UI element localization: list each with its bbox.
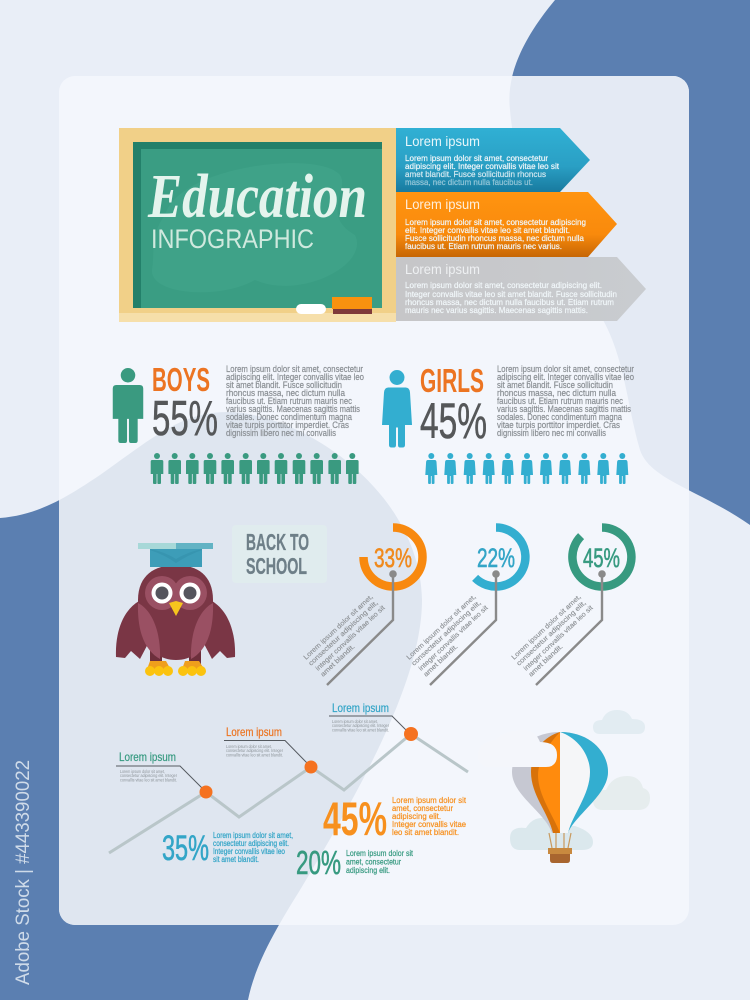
icon: cloud over balloon (478, 730, 557, 767)
callout: point 3: Lorem ipsum (332, 701, 389, 715)
text block (405, 217, 586, 251)
icon: owl (116, 543, 235, 676)
callout: point 2: convallis vitae leo sit amet blandit. (226, 752, 283, 758)
text block: dignissim libero nec mi convallis (497, 428, 606, 438)
stat: 35%: consectetur adipiscing elit. (213, 839, 289, 848)
rotated text: consectetur adipiscing elit, (516, 600, 588, 667)
donut: 33%: 33% (374, 543, 412, 573)
text block: faucibus ut. Etiam rutrum mauris nec (226, 396, 352, 406)
rotated text: integer convallis vitae leo sit (523, 605, 595, 672)
icon: girl (382, 370, 412, 448)
rotated text (303, 594, 387, 678)
text block: adipiscing elit. Integer convallis vitae leo sit (405, 161, 560, 171)
heading: boys: BOYS (152, 361, 210, 398)
heading: Infographic: INFOGRAPHIC (151, 224, 314, 254)
icon: boy (113, 368, 143, 443)
text block: rhoncus massa, nec dictum nulla (226, 388, 345, 398)
panel: main card (59, 76, 689, 925)
arrow: gray: Lorem ipsum (405, 262, 480, 277)
rotated text (511, 594, 595, 678)
chalk (296, 304, 326, 314)
stat: 45%: 45% (420, 393, 487, 449)
callout: point 3 (329, 701, 418, 741)
rotated text: Lorem ipsum dolor sit amet, (511, 594, 583, 661)
text block: sodales. Donec condimentum magna (226, 412, 352, 422)
callout: point 3: convallis vitae leo sit amet blandit. (332, 728, 389, 732)
text block (405, 153, 560, 187)
callout: point 3: Lorem ipsum dolor sit amet, (332, 719, 378, 724)
stat: 45%: amet, consectetur (392, 803, 453, 813)
stat: 55%: 55% (152, 392, 218, 446)
arrow: orange (396, 192, 617, 257)
stat: 35% (162, 829, 293, 868)
text block: vitae turpis porttitor imperdiet. Cras (226, 420, 349, 430)
rotated text: consectetur adipiscing elit, (411, 600, 483, 667)
text block: sodales. Donec condimentum magna (497, 412, 622, 422)
text block: sit amet blandit. Fusce sollicitudin (497, 380, 613, 390)
arrow: blue: Lorem ipsum (405, 134, 480, 149)
callout: point 1: Lorem ipsum dolor sit amet, (120, 769, 165, 774)
stat: 35%: Integer convallis vitae leo (213, 847, 286, 856)
callout: point 1 (116, 750, 212, 798)
callout: point 1: convallis vitae leo sit amet blandit. (120, 778, 177, 782)
text block: elit. Integer convallis vitae leo sit amet blandit. (405, 225, 570, 235)
panel: girls (382, 362, 634, 484)
stat: 45%: leo sit amet blandit. (392, 827, 459, 837)
text block (405, 280, 617, 315)
text block: Lorem ipsum dolor sit amet, consectetur adipiscing elit. (405, 280, 602, 290)
callout: point 1: Lorem ipsum (119, 750, 176, 764)
callout: back to school (232, 525, 327, 583)
callout: back to school: SCHOOL (246, 553, 307, 579)
stat: 35%: 35% (162, 829, 209, 868)
text block (226, 364, 364, 438)
heading: girls: GIRLS (420, 362, 484, 399)
icon: hot air balloon (512, 732, 608, 863)
text block: dignissim libero nec mi convallis (226, 428, 336, 438)
text block (497, 364, 634, 438)
text block: adipiscing elit. Integer convallis vitae leo (497, 372, 634, 382)
panel: boys (113, 361, 364, 484)
text block: vitae turpis porttitor imperdiet. Cras (497, 420, 620, 430)
stat: 45%: Integer convallis vitae (392, 819, 466, 829)
stat: 45%: Lorem ipsum dolor sit (392, 795, 467, 805)
text block: faucibus ut. Etiam rutrum mauris nec varius. (405, 241, 562, 251)
text block: Fusce sollicitudin rhoncus massa, nec dictum nulla (405, 233, 584, 243)
stock reference label: Adobe Stock | #443390022 (13, 760, 34, 985)
text block: varius sagittis. Maecenas sagittis mattis (226, 404, 360, 414)
stat: 20% (296, 844, 413, 881)
donut: 22% (406, 528, 525, 685)
text block: rhoncus massa, nec dictum nulla faucibus ut. Etiam rutrum (405, 297, 614, 307)
rotated text: consectetur adipiscing elit, (308, 600, 380, 667)
text block: rhoncus massa, nec dictum nulla (497, 388, 616, 398)
line chart (109, 701, 468, 853)
text block: mauris nec varius sagittis. Maecenas sagittis mattis. (405, 305, 588, 315)
callout: point 2: Lorem ipsum (226, 725, 282, 739)
text block: varius sagittis. Maecenas sagittis mattis (497, 404, 631, 414)
stat: 35%: sit amet blandit. (213, 855, 259, 864)
rotated text: amet blandit. (320, 643, 357, 678)
callout: point 2 (224, 725, 318, 774)
stat: 35%: Lorem ipsum dolor sit amet, (213, 831, 293, 840)
icon: clouds behind balloon (510, 710, 650, 850)
text block: Lorem ipsum dolor sit amet, consectetur adipiscing (405, 217, 586, 227)
text block: sit amet blandit. Fusce sollicitudin (226, 380, 342, 390)
icon row: boys (151, 453, 359, 484)
graduation cap (138, 543, 213, 567)
stat: 20%: amet, consectetur (346, 856, 401, 866)
icon row: girls (425, 453, 628, 484)
rotated text: integer convallis vitae leo sit (315, 605, 387, 672)
stat: 20%: 20% (296, 844, 341, 881)
callout: point 2: Lorem ipsum dolor sit amet, (226, 744, 272, 749)
stat: 20%: Lorem ipsum dolor sit (346, 848, 413, 858)
text block: Lorem ipsum dolor sit amet, consectetur (226, 364, 363, 374)
stat: 45% (323, 792, 467, 845)
arrow: gray (396, 257, 646, 321)
text block: Lorem ipsum dolor sit amet, consectetur (405, 153, 548, 163)
rotated text (406, 594, 490, 678)
callout: back to school: BACK TO (246, 529, 309, 555)
rotated text: amet blandit. (528, 643, 565, 678)
callout: point 3: consectetur adipiscing elit. Integer (332, 723, 389, 728)
chalkboard (119, 128, 396, 322)
text block: Integer convallis vitae leo sit amet blandit. Fusce sollicitudin (405, 289, 617, 299)
rotated text: integer convallis vitae leo sit (418, 605, 490, 672)
text block: massa, nec dictum nulla faucibus ut. (405, 177, 533, 187)
text block: adipiscing elit. Integer convallis vitae leo (226, 372, 364, 382)
arrow: blue (396, 128, 590, 192)
donut: 22%: 22% (477, 543, 515, 573)
text block: faucibus ut. Etiam rutrum mauris nec (497, 396, 623, 406)
eraser (332, 297, 372, 314)
text block: Lorem ipsum dolor sit amet, consectetur (497, 364, 634, 374)
donut: 45% (511, 528, 631, 685)
stat: 45%: adipiscing elit. (392, 811, 441, 821)
donut: 33% (303, 528, 422, 685)
arrow: orange: Lorem ipsum (405, 197, 480, 212)
stat: 20%: adipiscing elit. (346, 865, 390, 875)
heading: Education: Education (147, 163, 367, 231)
stat: 45%: 45% (323, 792, 387, 845)
text block: amet blandit. Fusce sollicitudin rhoncus (405, 169, 546, 179)
donut: 45%: 45% (583, 543, 620, 573)
rotated text: Lorem ipsum dolor sit amet, (406, 594, 478, 661)
rotated text: amet blandit. (423, 643, 460, 678)
callout: point 1: consectetur adipiscing elit. Integer (120, 773, 177, 778)
callout: point 2: consectetur adipiscing elit. Integer (226, 748, 283, 753)
rotated text: Lorem ipsum dolor sit amet, (303, 594, 375, 661)
